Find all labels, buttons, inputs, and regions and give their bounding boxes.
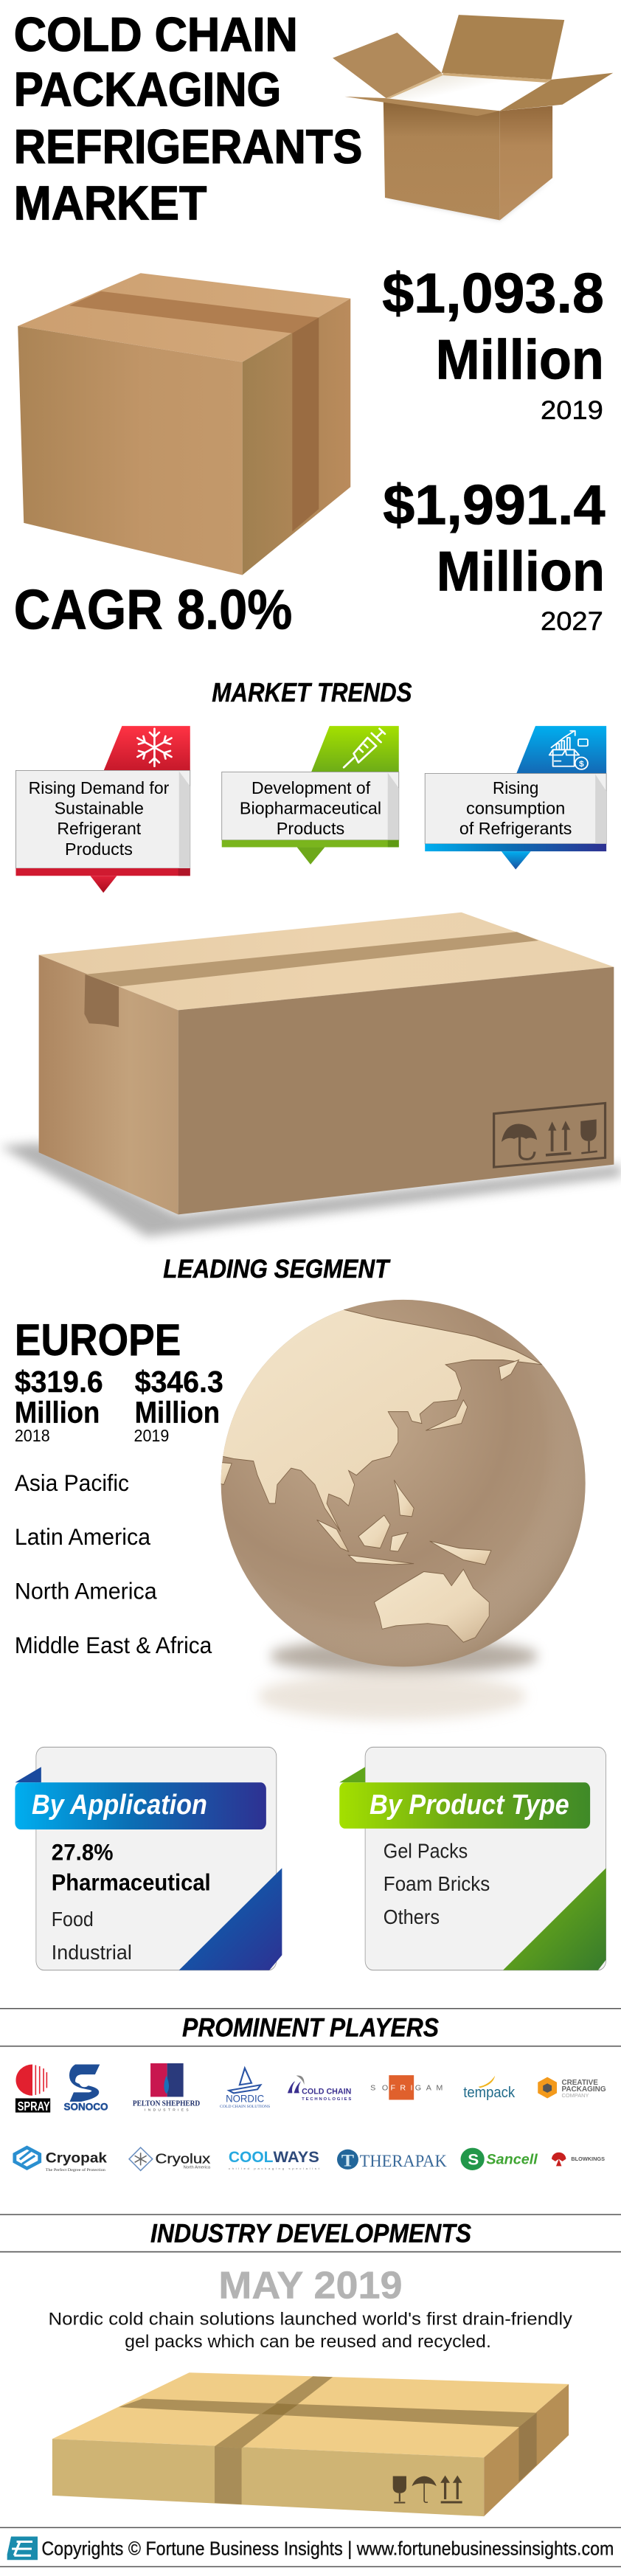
region: Europe: $346.3 (135, 1365, 223, 1399)
icon: handling marks (494, 1103, 606, 1167)
panel: by application: Pharmaceutical (52, 1869, 211, 1896)
list: other regions (15, 1470, 212, 1658)
logo: Creative Packaging (538, 2077, 606, 2099)
icon: handling marks (393, 2476, 462, 2502)
section: market trends (0, 678, 621, 1237)
logo: Cryolux: North America (184, 2166, 210, 2170)
logo: Cryopak: Cryopak (46, 2150, 108, 2166)
region: Europe: $319.6 (15, 1365, 103, 1399)
heading: industry developments: INDUSTRY DEVELOPMENTS (150, 2218, 471, 2248)
logo: Blowkings: BLOWKINGS (571, 2156, 605, 2162)
logo: Spray: SPRAY (18, 2099, 50, 2113)
panel: by application: Industrial (52, 1942, 132, 1964)
logo: Creative Packaging: COMPANY (561, 2092, 589, 2099)
logo: Sofrigam: SO (370, 2085, 388, 2092)
logo: Sancell (461, 2148, 538, 2170)
list: other regions: Latin America (15, 1524, 151, 1551)
banner: by application (15, 1782, 266, 1829)
icon: box with growth chart and dollar (549, 731, 588, 769)
logo: Cold Chain Technologies (288, 2076, 351, 2102)
logo: Sancell: S (468, 2150, 479, 2168)
panel: by product type (339, 1747, 606, 1970)
panel: by application: Food (52, 1908, 94, 1931)
region: Europe (15, 1315, 223, 1445)
logo: Nordic (220, 2068, 270, 2109)
stat: 2027 market size (383, 474, 606, 636)
panel: by product type: Gel Packs (384, 1840, 468, 1863)
section: header and market size (14, 8, 613, 641)
logo: Therapak: T (341, 2152, 354, 2170)
logo: Sonoco: SONOCO (63, 2102, 108, 2113)
icon: wooden globe (198, 1300, 586, 1720)
callout: biopharmaceutical products: Products (277, 820, 344, 839)
title: MARKET (14, 176, 207, 230)
icon: large cardboard box (0, 913, 621, 1237)
panel: by application (15, 1747, 282, 1970)
callout: sustainable refrigerant products: Rising Demand for (29, 779, 169, 798)
icon: Fortune Business Insights logo (7, 2536, 38, 2560)
logo: Coolways (229, 2147, 320, 2170)
logo: Pelton Shepherd (133, 2063, 200, 2112)
logo: Coolways: COOL (229, 2147, 274, 2166)
logo: Tempack (463, 2076, 516, 2101)
stat: 2019 market size: Million (436, 329, 604, 391)
logo: Creative Packaging: PACKAGING (561, 2085, 606, 2094)
region: Europe: 2019 (134, 1427, 169, 1445)
callout: biopharmaceutical products: Biopharmaceutical (240, 799, 381, 818)
logo: Coolways: chilled packaging specialist (229, 2167, 320, 2170)
section: leading segment (15, 1255, 606, 1970)
stat: 2019 market size (382, 262, 604, 426)
region: Europe: EUROPE (15, 1315, 181, 1365)
stat: 2019 market size: 2019 (541, 396, 603, 426)
logo: Cold Chain Technologies: COLD CHAIN (302, 2088, 351, 2096)
callout: sustainable refrigerant products (15, 726, 190, 893)
logos: prominent players (15, 2063, 606, 2172)
title: REFRIGERANTS (14, 120, 362, 173)
heading: market trends: MARKET TRENDS (212, 678, 412, 707)
logo: Tempack: tempack (463, 2085, 516, 2101)
callout: sustainable refrigerant products: Refrigerant (57, 820, 141, 839)
icon: syringe (344, 729, 385, 767)
icon: snowflake (137, 729, 172, 766)
section: players, developments, footer (0, 2009, 621, 2566)
stat: CAGR: CAGR 8.0% (14, 578, 292, 641)
logo: Sofrigam: GAM (415, 2085, 443, 2092)
callout: consumption of refrigerants: Rising (493, 779, 538, 798)
logo: Nordic: COLD CHAIN SOLUTIONS (220, 2105, 270, 2109)
panel: by product type: Others (384, 1906, 440, 1929)
stat: 2027 market size: Million (437, 541, 605, 603)
logo: Cryopak (15, 2147, 108, 2172)
logo: Cryolux (129, 2147, 211, 2170)
logo: Nordic: NORDIC (226, 2093, 264, 2104)
logo: Sofrigam (370, 2075, 443, 2099)
logo: Cryolux: Cryolux (156, 2152, 211, 2167)
region: Europe: Million (15, 1396, 100, 1429)
icon: closed cardboard box with tape (18, 273, 350, 575)
logo: Sofrigam: FRI (390, 2085, 413, 2092)
icon: open cardboard box (333, 15, 613, 220)
callout: consumption of refrigerants: consumption (466, 799, 565, 818)
list: other regions: Middle East & Africa (15, 1632, 212, 1658)
date: May 2019: MAY 2019 (218, 2264, 403, 2307)
logo: Cryopak: The Perfect Degree of Protection (46, 2167, 105, 2172)
panel: by application: 27.8% (52, 1839, 114, 1866)
stat: 2027 market size: 2027 (541, 607, 603, 636)
list: other regions: Asia Pacific (15, 1470, 129, 1496)
heading: prominent players: PROMINENT PLAYERS (182, 2013, 439, 2042)
callout: sustainable refrigerant products: Sustainable (55, 799, 144, 818)
panel: by product type: Foam Bricks (384, 1873, 490, 1895)
logo: Cold Chain Technologies: TECHNOLOGIES (302, 2097, 351, 2102)
banner: by application: By Application (32, 1789, 207, 1821)
banner: by product type (339, 1782, 590, 1829)
logo: Sonoco (63, 2064, 108, 2113)
text: development description: gel packs which can be reused and recycled. (125, 2333, 491, 2352)
region: Europe: 2018 (15, 1427, 50, 1445)
stat: 2019 market size: $1,093.8 (382, 262, 604, 325)
heading: leading segment: LEADING SEGMENT (163, 1255, 391, 1283)
title: COLD CHAIN (14, 8, 298, 61)
text: development description: Nordic cold chain solutions launched world's first drain-friendly (49, 2310, 573, 2329)
title: PACKAGING (14, 63, 281, 117)
callout: consumption of refrigerants: $ (579, 760, 584, 769)
logo: Therapak: THERAPAK (360, 2153, 447, 2171)
callout: sustainable refrigerant products: Products (65, 840, 133, 859)
callout: biopharmaceutical products (222, 726, 399, 865)
logo: Pelton Shepherd: PELTON SHEPHERD (133, 2100, 200, 2108)
logo: Spray (15, 2064, 50, 2113)
list: other regions: North America (15, 1578, 157, 1604)
banner: by product type: By Product Type (370, 1789, 569, 1821)
logo: Coolways: WAYS (274, 2147, 319, 2166)
callout: biopharmaceutical products: Development of (251, 779, 370, 798)
logo: Blowkings (552, 2153, 605, 2166)
callout: consumption of refrigerants: of Refrigerants (459, 820, 572, 839)
stat: 2027 market size: $1,991.4 (383, 474, 606, 536)
logo: Sancell: Sancell (486, 2152, 538, 2167)
logo: Pelton Shepherd: INDUSTRIES (145, 2108, 189, 2112)
icon: flat cardboard package (52, 2372, 569, 2516)
callout: consumption of refrigerants (425, 726, 606, 870)
logo: Therapak (337, 2150, 447, 2171)
region: Europe: Million (135, 1396, 220, 1429)
logo: Creative Packaging: CREATIVE (561, 2079, 598, 2087)
text: development description (49, 2310, 573, 2352)
title (14, 8, 362, 230)
